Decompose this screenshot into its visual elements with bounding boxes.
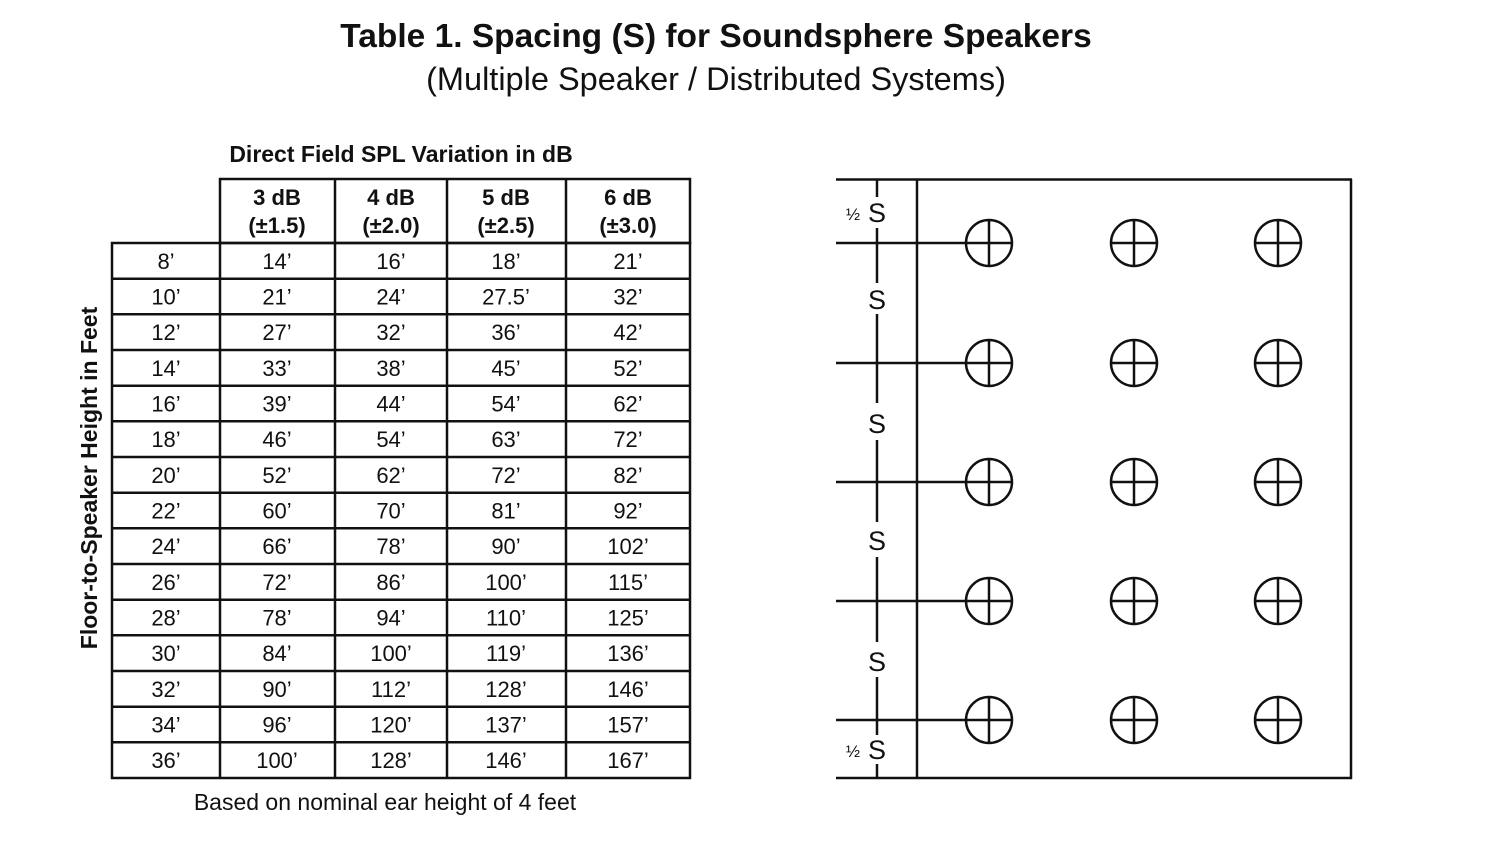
- table: 33’: [262, 356, 292, 381]
- table caption: Direct Field SPL Variation in dB: [229, 141, 573, 167]
- table: 72’: [491, 463, 521, 488]
- table: 46’: [262, 427, 292, 452]
- table: 10’: [151, 284, 181, 310]
- diagram: speaker layout: [836, 179, 1352, 779]
- table: 66’: [262, 534, 292, 559]
- table: 78’: [376, 534, 406, 559]
- footnote: Based on nominal ear height of 4 feet: [194, 789, 577, 815]
- table: 62’: [613, 392, 643, 416]
- table: 54’: [491, 392, 521, 416]
- table: 32’: [613, 284, 643, 310]
- table: 21’: [262, 284, 292, 310]
- table: 72’: [262, 570, 292, 595]
- table: 22’: [151, 498, 181, 524]
- table: 24’: [376, 284, 406, 310]
- axis label: Floor-to-Speaker Height in Feet: [76, 306, 102, 649]
- table: 38’: [376, 356, 406, 381]
- table: 42’: [613, 320, 643, 345]
- spacing labels: [846, 198, 886, 765]
- spacing labels: S: [868, 647, 886, 677]
- table: 94’: [376, 606, 406, 630]
- header row: 3 dB: [253, 185, 301, 210]
- table: 110’: [486, 606, 526, 630]
- table: 136’: [607, 641, 649, 666]
- table: 62’: [376, 463, 406, 488]
- table: 157’: [607, 712, 649, 738]
- table: 30’: [151, 641, 181, 666]
- table: [112, 179, 690, 778]
- table: 36’: [151, 748, 181, 773]
- table: 72’: [613, 427, 643, 452]
- table: 119’: [486, 641, 526, 666]
- header row: (±2.5): [477, 213, 535, 238]
- table: 146’: [485, 748, 527, 773]
- table: 92’: [613, 498, 643, 524]
- table: 52’: [262, 463, 292, 488]
- table: 24’: [151, 534, 181, 559]
- table: 28’: [151, 606, 181, 630]
- table: 86’: [376, 570, 406, 595]
- header row: 5 dB: [482, 185, 530, 210]
- table: 125’: [607, 606, 649, 630]
- header row: (±3.0): [599, 213, 657, 238]
- dimension line segments: [876, 180, 878, 197]
- table: 112’: [371, 677, 411, 702]
- table: 84’: [262, 641, 292, 666]
- table: 78’: [262, 606, 292, 630]
- table: 44’: [376, 392, 406, 416]
- table: 90’: [491, 534, 521, 559]
- table: 128’: [485, 677, 527, 702]
- table: 16’: [376, 249, 406, 274]
- table: 54’: [376, 427, 406, 452]
- title: (Multiple Speaker / Distributed Systems): [426, 61, 1006, 97]
- header row: (±2.0): [362, 213, 420, 238]
- table: 32’: [151, 677, 181, 702]
- table: 128’: [370, 748, 412, 773]
- table: 137’: [485, 712, 527, 738]
- table: 146’: [607, 677, 649, 702]
- table: 26’: [151, 570, 181, 595]
- spacing labels: S: [868, 526, 886, 556]
- table: 82’: [613, 463, 643, 488]
- table: 100’: [485, 570, 527, 595]
- header row: 6 dB: [604, 185, 652, 210]
- table: 34’: [151, 712, 181, 738]
- table: 14’: [262, 249, 292, 274]
- header row: 4 dB: [367, 185, 415, 210]
- table: 27.5’: [482, 284, 530, 310]
- table: 120’: [370, 712, 412, 738]
- table: 36’: [491, 320, 521, 345]
- spacing labels: S: [868, 735, 886, 765]
- title: Table 1. Spacing (S) for Soundsphere Speakers: [340, 18, 1092, 55]
- table: 90’: [262, 677, 292, 702]
- table: 60’: [262, 498, 292, 524]
- table: 32’: [376, 320, 406, 345]
- table: 81’: [491, 498, 521, 524]
- spacing labels: S: [868, 409, 886, 439]
- header row: (±1.5): [248, 213, 306, 238]
- table: 52’: [613, 356, 643, 381]
- spacing labels: S: [868, 285, 886, 315]
- table: 39’: [262, 392, 292, 416]
- table: 45’: [491, 356, 521, 381]
- spacing labels: ½: [846, 742, 860, 761]
- header row: [248, 185, 657, 238]
- table: 100’: [370, 641, 412, 666]
- table: 167’: [607, 748, 649, 773]
- table: 70’: [376, 498, 406, 524]
- table: 63’: [491, 427, 521, 452]
- table: 16’: [151, 392, 181, 416]
- table: 115’: [608, 570, 648, 595]
- table: 102’: [607, 534, 649, 559]
- table: 100’: [256, 748, 298, 773]
- table: 27’: [262, 320, 292, 345]
- table: 20’: [151, 463, 181, 488]
- table: 8’: [157, 249, 175, 274]
- table: 96’: [262, 712, 292, 738]
- table: 18’: [491, 249, 521, 274]
- table: 14’: [151, 356, 181, 381]
- table: 12’: [151, 320, 181, 345]
- spacing labels: ½: [846, 205, 860, 224]
- spacing labels: S: [868, 198, 886, 228]
- table: 18’: [151, 427, 181, 452]
- table: 21’: [613, 249, 643, 274]
- title: [340, 18, 1092, 97]
